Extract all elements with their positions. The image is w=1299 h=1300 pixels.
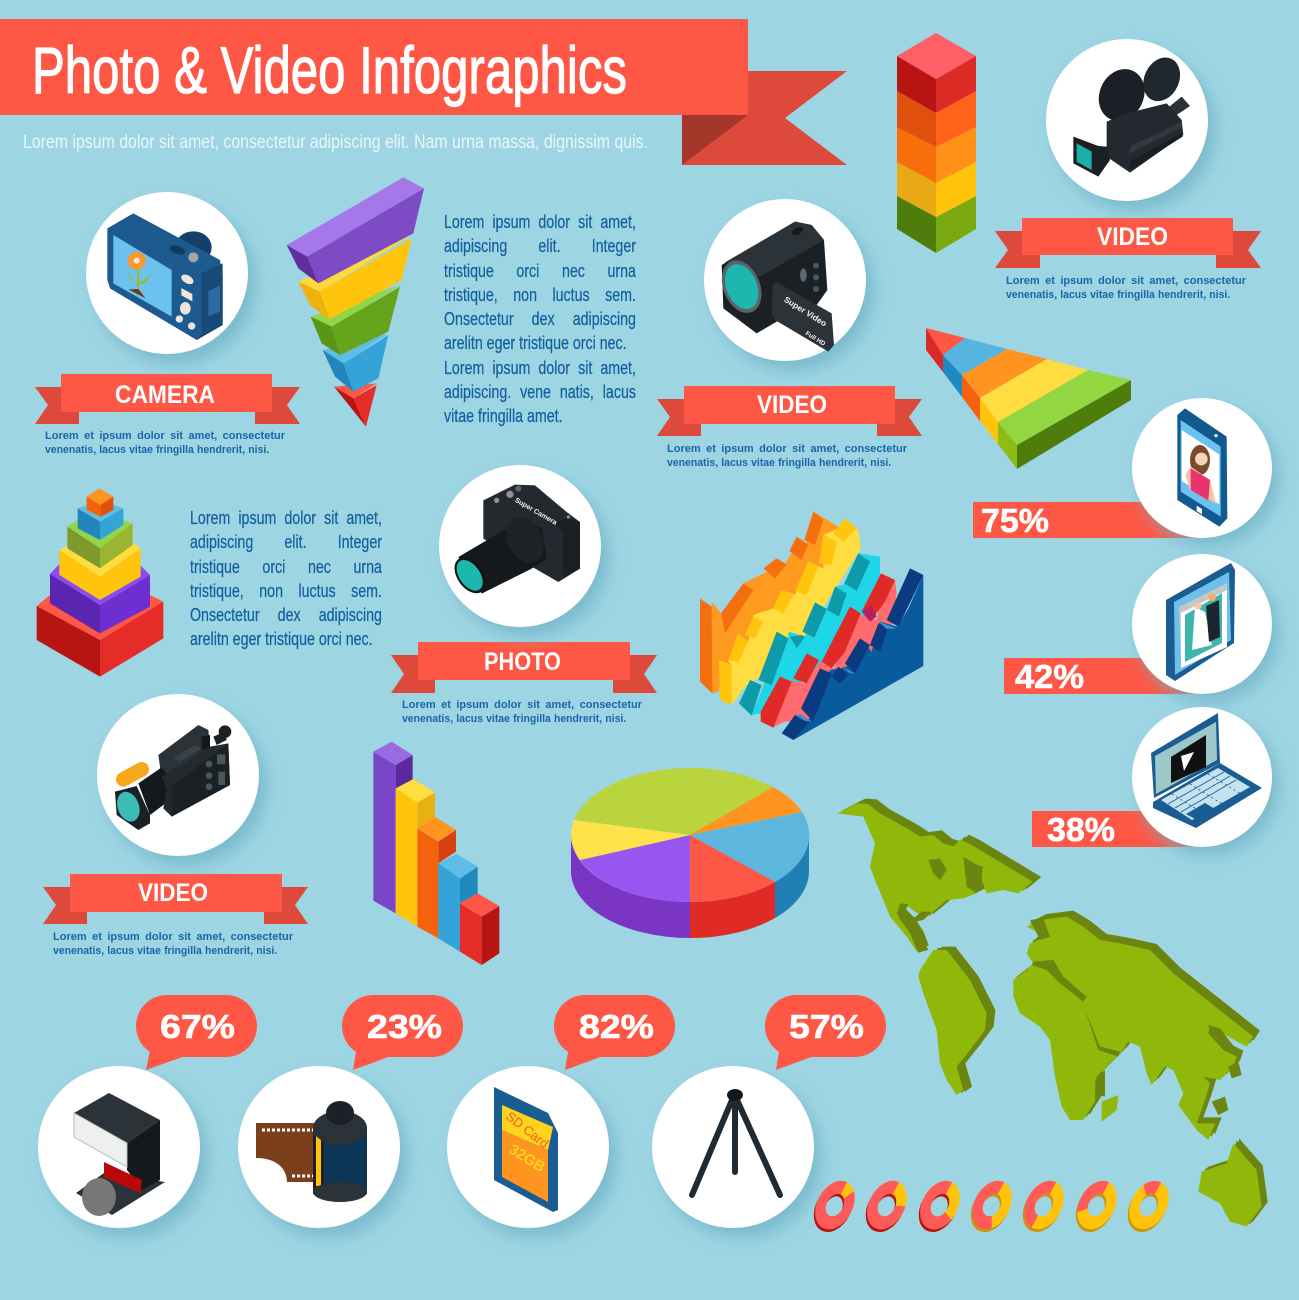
- ribbon: video middle: VIDEO: [757, 391, 827, 419]
- text block: upper paragraph: tristique orci nec urna: [444, 260, 636, 280]
- isometric bar chart: [373, 742, 499, 965]
- ribbon: camera: [35, 374, 300, 424]
- subtitle: Lorem ipsum dolor sit amet, consectetur adipiscing elit. Nam urna massa, dignissim quis.: [23, 132, 648, 153]
- ribbon: camera: CAMERA: [115, 381, 215, 409]
- text block: upper paragraph: [444, 212, 636, 426]
- ribbon: video middle: [657, 386, 922, 436]
- icon: compact video camera: [704, 199, 874, 371]
- flat pyramid chart: [926, 328, 1131, 469]
- text block: upper paragraph: Onsectetur dex adipiscing: [444, 309, 636, 329]
- caption: photo: venenatis, lacus vitae fringilla hendrerit, nisi.: [402, 713, 626, 725]
- bubble: 57%: 57%: [789, 1008, 864, 1045]
- icon: tripod: [652, 1066, 822, 1238]
- caption: video left: venenatis, lacus vitae fringilla hendrerit, nisi.: [53, 945, 277, 957]
- text block: upper paragraph: arelitn eger tristique orci nec.: [444, 333, 627, 353]
- icon: flash: [38, 1066, 208, 1238]
- caption: video middle: venenatis, lacus vitae fringilla hendrerit, nisi.: [667, 457, 891, 469]
- text block: lower paragraph: Lorem ipsum dolor sit amet,: [190, 508, 382, 528]
- world map: [837, 799, 1268, 1227]
- text block: upper paragraph: Lorem ipsum dolor sit amet,: [444, 212, 636, 232]
- ribbon: video left: [43, 874, 308, 924]
- icon: tablet: [1132, 554, 1279, 703]
- pie chart: [571, 768, 809, 938]
- bubble: 82%: [554, 995, 675, 1070]
- caption: camera: [45, 430, 285, 456]
- bar: 42%: 42%: [1015, 658, 1084, 695]
- caption: camera: Lorem et ipsum dolor sit amet, consectetur: [45, 430, 285, 442]
- icon: SD card: SD Card: [503, 1109, 552, 1151]
- donut row: [813, 1182, 1169, 1231]
- map: eurasia and africa: [1013, 911, 1260, 1140]
- bubble: 57%: [765, 995, 886, 1070]
- text block: upper paragraph: vitae fringilla amet.: [444, 406, 563, 426]
- ribbon: video top right: VIDEO: [1097, 223, 1168, 251]
- bubble: 82%: 82%: [579, 1008, 654, 1045]
- caption: photo: Lorem et ipsum dolor sit amet, consectetur: [402, 699, 642, 711]
- icon: camera back: [86, 192, 256, 364]
- bar: 75%: 75%: [981, 502, 1049, 539]
- map: australia: [1198, 1139, 1268, 1227]
- text block: lower paragraph: arelitn eger tristique orci nec.: [190, 629, 373, 649]
- funnel chart: [287, 177, 424, 427]
- icon: film roll: [238, 1066, 408, 1238]
- bar: 75%: [973, 502, 1193, 539]
- text block: lower paragraph: Onsectetur dex adipiscing: [190, 605, 382, 625]
- caption: video middle: [667, 443, 907, 469]
- ribbon: photo: [391, 642, 657, 693]
- stepped pyramid chart: [37, 488, 163, 677]
- caption: photo: [402, 699, 642, 725]
- title: Photo & Video Infographics: [32, 33, 627, 107]
- icon: DSLR photo camera: Super Camera: [513, 497, 558, 527]
- icon: compact video camera: Super Video: [782, 294, 829, 328]
- caption: camera: venenatis, lacus vitae fringilla hendrerit, nisi.: [45, 444, 269, 456]
- caption: video top right: [1006, 275, 1246, 301]
- icon: SD card: [447, 1066, 617, 1238]
- text block: upper paragraph: Lorem ipsum dolor sit amet,: [444, 358, 636, 378]
- ribbon: video left: VIDEO: [138, 879, 208, 907]
- caption: video left: [53, 931, 293, 957]
- text block: lower paragraph: tristique, non luctus sem.: [190, 581, 382, 601]
- caption: video middle: Lorem et ipsum dolor sit amet, consectetur: [667, 443, 907, 455]
- bubble: 67%: 67%: [160, 1008, 235, 1045]
- bar: 38%: [1032, 811, 1194, 848]
- text block: upper paragraph: adipiscing elit. Integer: [444, 236, 636, 256]
- bubble: 67%: [136, 995, 257, 1070]
- stacked column chart: [897, 33, 976, 253]
- bar: 38%: 38%: [1047, 811, 1115, 848]
- map: americas: [837, 799, 1041, 1095]
- text block: lower paragraph: [190, 508, 382, 650]
- bar: 42%: [1004, 658, 1194, 695]
- icon: camcorder: [97, 694, 267, 866]
- text block: lower paragraph: tristique orci nec urna: [190, 556, 382, 576]
- layered area chart: [700, 512, 923, 740]
- icon: DSLR photo camera: [439, 465, 609, 637]
- title banner: [0, 19, 847, 165]
- caption: video top right: Lorem et ipsum dolor sit amet, consectetur: [1006, 275, 1246, 287]
- icon: compact video camera: Full HD: [804, 330, 827, 348]
- ribbon: video top right: [995, 218, 1261, 268]
- caption: video top right: venenatis, lacus vitae fringilla hendrerit, nisi.: [1006, 289, 1230, 301]
- bubble: 23%: 23%: [367, 1008, 442, 1045]
- icon: film camera: [1046, 39, 1216, 211]
- text block: upper paragraph: tristique, non luctus sem.: [444, 285, 636, 305]
- text block: upper paragraph: adipiscing. vene natis, lacus: [444, 382, 636, 402]
- text block: lower paragraph: adipiscing elit. Integer: [190, 532, 382, 552]
- icon: SD card: 32GB: [506, 1141, 548, 1176]
- icon: laptop: [1132, 707, 1279, 856]
- icon: smartphone: [1132, 398, 1279, 547]
- ribbon: photo: PHOTO: [484, 648, 561, 676]
- caption: video left: Lorem et ipsum dolor sit amet, consectetur: [53, 931, 293, 943]
- bubble: 23%: [342, 995, 463, 1070]
